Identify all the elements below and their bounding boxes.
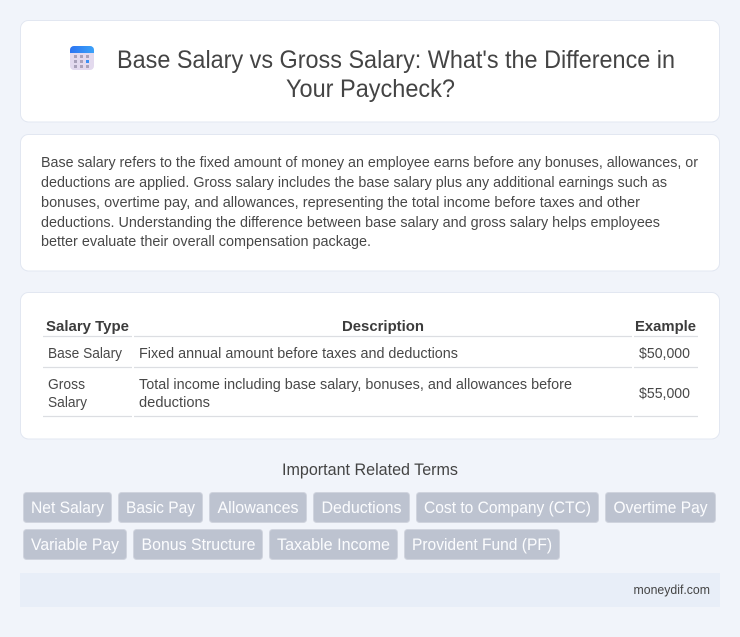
title: Your Paycheck? bbox=[286, 76, 455, 103]
text block: definition: deductions are applied. Gross salary includes the base salary plus any additional earnings such as bbox=[41, 175, 667, 191]
title bbox=[117, 47, 675, 103]
table row: base salary bbox=[48, 346, 690, 362]
tag: Basic Pay bbox=[118, 492, 202, 522]
panel: comparison table bbox=[20, 292, 720, 439]
text block: definition: bonuses, overtime pay, and allowances, representing the total income before taxes and other bbox=[41, 195, 640, 211]
table row: base salary: Base Salary bbox=[48, 346, 123, 362]
tag: Taxable Income bbox=[270, 530, 398, 560]
tag: Deductions bbox=[314, 492, 410, 522]
tag: Overtime Pay: Overtime Pay bbox=[614, 499, 708, 517]
table row: gross salary: $55,000 bbox=[639, 386, 690, 402]
tag: Bonus Structure: Bonus Structure bbox=[142, 536, 256, 554]
tag: Taxable Income: Taxable Income bbox=[277, 536, 390, 554]
table header: Example bbox=[635, 318, 696, 335]
table row: gross salary bbox=[48, 377, 690, 411]
footer bar bbox=[20, 573, 720, 607]
text block: definition: Base salary refers to the fixed amount of money an employee earns before any bonuses, allowances, or bbox=[41, 155, 698, 171]
icon: calendar bbox=[70, 46, 94, 70]
heading: related terms: Important Related Terms bbox=[282, 461, 458, 479]
tag list: related terms bbox=[24, 492, 716, 560]
text block: definition: better evaluate their overall compensation package. bbox=[41, 234, 371, 250]
tag: Provident Fund (PF): Provident Fund (PF) bbox=[412, 536, 552, 554]
text block: definition: deductions. Understanding the difference between base salary and gross salary helps employees bbox=[41, 215, 660, 231]
table header: Salary Type bbox=[46, 318, 129, 335]
table header: Description bbox=[342, 318, 424, 335]
title: Base Salary vs Gross Salary: What's the Difference in bbox=[117, 47, 675, 74]
text block: definition bbox=[41, 155, 698, 250]
tag: Net Salary bbox=[24, 492, 112, 522]
footer source text: moneydif.com bbox=[634, 582, 710, 597]
tag: Basic Pay: Basic Pay bbox=[126, 499, 196, 517]
tag: Variable Pay: Variable Pay bbox=[31, 536, 120, 554]
table row: gross salary: Salary bbox=[48, 395, 88, 411]
tag: Allowances: Allowances bbox=[218, 499, 298, 517]
tag: Provident Fund (PF) bbox=[404, 530, 560, 560]
tag: Cost to Company (CTC): Cost to Company (CTC) bbox=[424, 499, 591, 517]
tag: Variable Pay bbox=[24, 530, 126, 560]
table row: gross salary: Gross bbox=[48, 377, 85, 393]
table row: gross salary: deductions bbox=[139, 395, 210, 411]
panel: intro text bbox=[20, 134, 720, 271]
tag: Allowances bbox=[210, 492, 306, 522]
tag: Deductions: Deductions bbox=[322, 499, 402, 517]
tag: Net Salary: Net Salary bbox=[31, 499, 105, 517]
table row: base salary: $50,000 bbox=[639, 346, 690, 362]
tag: Overtime Pay bbox=[606, 492, 716, 522]
table header bbox=[46, 318, 696, 335]
tag: Cost to Company (CTC) bbox=[416, 492, 598, 522]
tag: Bonus Structure bbox=[134, 530, 262, 560]
table row: base salary: Fixed annual amount before taxes and deductions bbox=[139, 346, 458, 362]
header panel bbox=[20, 20, 720, 122]
table row: gross salary: Total income including base salary, bonuses, and allowances before bbox=[139, 377, 572, 393]
